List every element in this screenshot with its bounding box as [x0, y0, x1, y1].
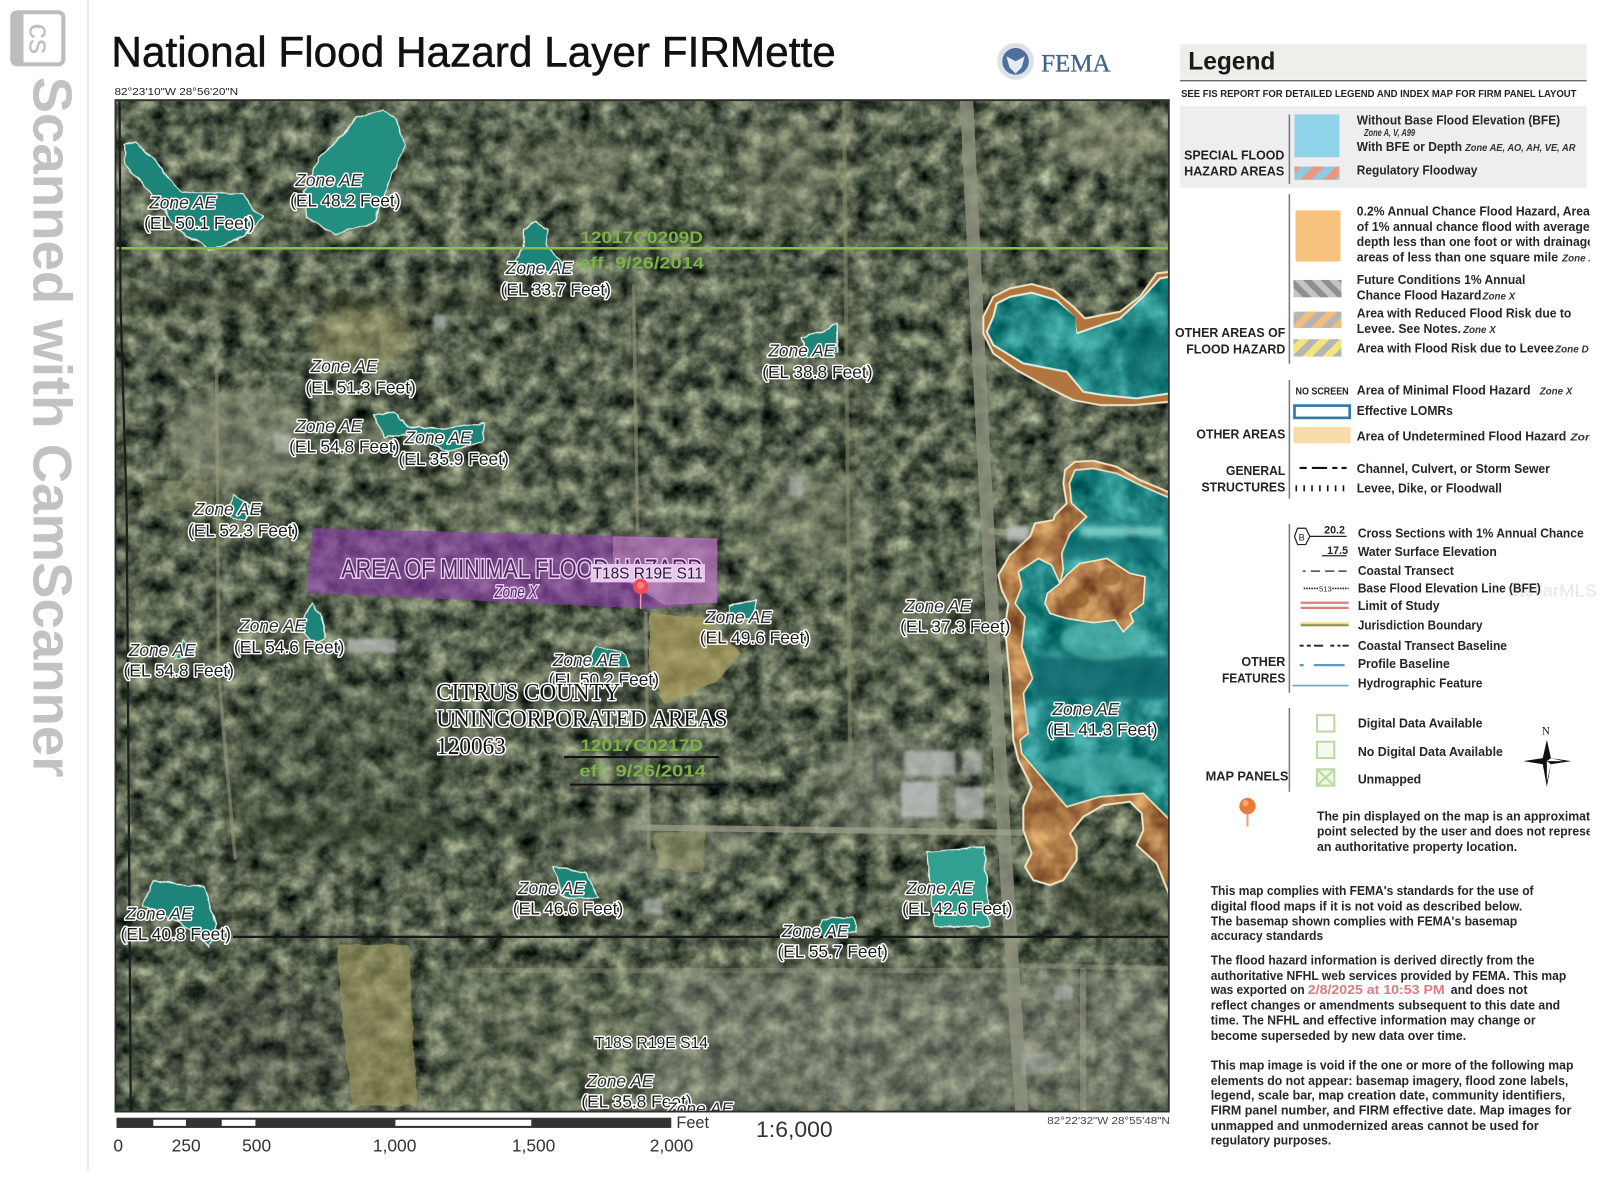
legend group: other areas and general structures: [1196, 380, 1600, 499]
community label: [436, 679, 727, 760]
zone label EL 50.1: [144, 192, 254, 233]
legend group: other areas and general structures: Area of Undetermined Flood Hazard: [1357, 428, 1566, 443]
zone label EL 46.6: Zone AE: [517, 878, 585, 898]
legend group: other features: 17.5: [1327, 545, 1348, 557]
water bands: [1027, 527, 1168, 787]
map scale ratio: 1:6,000: [756, 1117, 833, 1142]
zone label EL 41.3: Zone AE: [1051, 699, 1120, 719]
lighter clearings and neighbourhoods: [115, 107, 1170, 1109]
zone label EL 49.6: (EL 49.6 Feet): [700, 628, 810, 648]
zone label EL 42.6: Zone AE: [905, 878, 974, 898]
compliance note: [1211, 883, 1534, 943]
legend group: other areas of flood hazard: [1175, 194, 1595, 364]
icon: location pin: [633, 579, 648, 609]
legend group: special flood hazard areas: Zone AE, AO, AH, VE, AR: [1464, 143, 1575, 154]
scale bar: [113, 1114, 710, 1155]
zone label EL 54.8 lower: [124, 640, 234, 680]
zone label EL 51.3: Zone AE: [310, 356, 378, 376]
zone label EL 33.7: (EL 33.7 Feet): [501, 279, 611, 299]
compliance note: The basemap shown complies with FEMA's basemap: [1211, 914, 1517, 929]
title: National Flood Hazard Layer FIRMette: [111, 28, 836, 76]
area of minimal flood hazard overlay: [307, 528, 717, 609]
CamScanner watermark: [11, 0, 88, 1171]
satellite map with flood zones: [115, 100, 1171, 1119]
legend group: other areas of flood hazard: Area with Flood Risk due to Levee: [1357, 340, 1554, 355]
legend group: special flood hazard areas: Without Base Flood Elevation (BFE): [1357, 113, 1560, 128]
icon: legend pin: [1239, 798, 1256, 827]
export date note: was exported on: [1210, 982, 1305, 997]
legend group: special flood hazard areas: [1180, 106, 1587, 188]
legend group: other features: Base Flood Elevation Line (BFE): [1358, 581, 1541, 596]
zone label EL 37.3: (EL 37.3 Feet): [900, 616, 1010, 636]
zone label EL 48.2: Zone AE: [294, 170, 363, 190]
panel label: 12017C0209D: eff. 9/26/2014: [579, 255, 704, 273]
export date note: [1210, 952, 1566, 1043]
zone label EL 54.6: (EL 54.6 Feet): [234, 637, 344, 657]
icon: north arrow: N: [1542, 726, 1550, 738]
zone label EL 41.3: (EL 41.3 Feet): [1047, 720, 1158, 740]
export date note: authoritative NFHL web services provided by FEMA. This map: [1211, 968, 1566, 983]
compliance note: digital flood maps if it is not void as described below.: [1211, 898, 1522, 913]
void conditions note: regulatory purposes.: [1211, 1132, 1331, 1147]
section label T18S R19E S14: T18S R19E S14: [595, 1035, 709, 1052]
flood zone labels: [121, 170, 1158, 1119]
flood zone shape: upper lake: [983, 272, 1170, 405]
zone label EL 51.3: [306, 356, 416, 397]
legend group: other features: OTHER: [1241, 654, 1286, 669]
zone label EL 54.6: Zone AE: [238, 615, 306, 635]
zone label EL 54.8 upper: [289, 416, 399, 457]
zone label EL 55.7: Zone AE: [781, 921, 849, 941]
zone label EL 54.8 upper: Zone AE: [294, 416, 363, 436]
legend group: other areas and general structures: GENERAL: [1226, 463, 1285, 478]
zone label EL 38.8: Zone AE: [767, 341, 836, 361]
zone label EL 52.3: [188, 499, 298, 540]
zone label EL 40.8: (EL 40.8 Feet): [121, 924, 231, 944]
legend group: map panels: MAP PANELS: [1206, 769, 1289, 784]
zone label EL 50.2: [549, 650, 659, 690]
legend group: map panels: Unmapped: [1358, 772, 1421, 787]
sand island: [1045, 558, 1145, 632]
legend heading: Legend: [1188, 48, 1275, 75]
flood zone shapes: small ponds: [125, 109, 989, 946]
zone label EL 54.6: [234, 615, 344, 657]
void conditions note: [1211, 1058, 1574, 1147]
icon: CS logo: cs: [23, 23, 57, 54]
scale bar: 1,000: [373, 1135, 416, 1155]
zone label EL 51.3: (EL 51.3 Feet): [306, 377, 416, 397]
void conditions note: elements do not appear: basemap imagery, flood zone labels,: [1211, 1073, 1568, 1088]
community label: CITRUS COUNTY: [436, 679, 620, 706]
legend group: other areas and general structures: Levee, Dike, or Floodwall: [1357, 480, 1502, 495]
void conditions note: FIRM panel number, and FIRM effective date. Map images for: [1211, 1103, 1571, 1118]
zone label EL 42.6: [902, 878, 1012, 918]
panel label: 12017C0209D: [580, 232, 704, 269]
legend group: other areas and general structures: Zone X: [1539, 386, 1573, 397]
void conditions note: unmapped and unmodernized areas cannot be used for: [1211, 1118, 1539, 1133]
legend group: other areas of flood hazard: Zone X: [1561, 254, 1595, 265]
legend group: other areas of flood hazard: Zone D: [1554, 344, 1589, 355]
legend heading: [1180, 44, 1587, 81]
watermark text: Scanned with CamScanner: [22, 77, 84, 778]
map border: [115, 100, 1169, 1112]
label: area of minimal flood hazard: AREA OF MINIMAL FLOOD HAZARD: [341, 555, 703, 583]
icon: CS logo: [11, 11, 63, 65]
pin note: [1317, 808, 1600, 854]
top-left coordinates: 82°23'10"W 28°56'20"N: [114, 87, 238, 98]
legend group: other areas of flood hazard: Zone X: [1481, 291, 1516, 302]
tan fields: [143, 480, 741, 1105]
community label: UNINCORPORATED AREAS: [436, 705, 727, 732]
scale bar: 0: [113, 1135, 123, 1155]
legend group: other features: [1222, 524, 1584, 693]
zone label EL 48.2: (EL 48.2 Feet): [290, 190, 401, 210]
legend group: special flood hazard areas: With BFE or Depth: [1357, 139, 1462, 154]
zone label EL 37.3: [900, 596, 1010, 636]
legend group: other areas of flood hazard: of 1% annual chance flood with average: [1357, 219, 1590, 234]
zone label EL 49.6: [700, 607, 810, 648]
label: T18S R19E S11: T18S R19E S11: [593, 565, 703, 582]
legend group: other features: Coastal Transect: [1358, 563, 1455, 578]
zone label EL 33.7: Zone AE: [505, 258, 573, 278]
panel label: 12017C0217D: eff. 9/26/2014: [579, 762, 706, 780]
legend group: other features: Water Surface Elevation: [1358, 544, 1497, 559]
legend group: other areas and general structures: Area of Minimal Flood Hazard: [1357, 382, 1531, 397]
export date note: The flood hazard information is derived directly from the: [1211, 952, 1535, 967]
legend group: other areas of flood hazard: Levee. See Notes.: [1357, 321, 1461, 336]
export date note: and does not: [1451, 982, 1528, 997]
zone label EL 37.3: Zone AE: [903, 596, 972, 616]
legend group: other areas and general structures: OTHER AREAS: [1196, 426, 1285, 441]
legend group: other features: Limit of Study: [1358, 598, 1440, 613]
zone label EL 46.6: (EL 46.6 Feet): [513, 898, 623, 918]
zone label EL 35.9: (EL 35.9 Feet): [398, 449, 509, 469]
legend group: other areas of flood hazard: FLOOD HAZARD: [1186, 342, 1286, 357]
zone label EL 35.9: Zone AE: [404, 427, 472, 447]
zone label EL 33.7: [501, 258, 611, 299]
label: Zone X: Zone X: [494, 582, 539, 602]
legend group: other areas and general structures: Effective LOMRs: [1357, 403, 1453, 418]
legend group: map panels: [1206, 708, 1503, 792]
legend group: other areas of flood hazard: depth less than one foot or with drainage: [1357, 234, 1594, 249]
icon: DHS seal: [997, 43, 1034, 80]
zone label EL 54.8 lower: Zone AE: [128, 640, 196, 660]
scale bar: 2,000: [650, 1135, 693, 1155]
legend note: SEE FIS REPORT FOR DETAILED LEGEND AND INDEX MAP FOR FIRM PANEL LAYOUT: [1181, 89, 1577, 100]
FEMA logo: [997, 43, 1111, 80]
buildings: [274, 315, 1073, 1075]
legend group: other areas and general structures: Channel, Culvert, or Storm Sewer: [1357, 461, 1550, 476]
community label: 120063: [436, 733, 506, 760]
export date note: 2/8/2025 at 10:53 PM: [1308, 982, 1445, 997]
zone label EL 35.8: (EL 35.8 Feet): [581, 1092, 692, 1112]
pin note: an authoritative property location.: [1317, 839, 1517, 854]
legend group: other areas of flood hazard: 0.2% Annual Chance Flood Hazard, Area: [1357, 204, 1591, 219]
legend group: special flood hazard areas: HAZARD AREAS: [1184, 164, 1284, 179]
legend group: other features: 20.2: [1324, 524, 1345, 536]
zone label EL 38.8: (EL 38.8 Feet): [762, 362, 873, 382]
legend group: special flood hazard areas: SPECIAL FLOOD: [1184, 147, 1285, 162]
export date note: become superseded by new data over time.: [1211, 1028, 1466, 1043]
zone label EL 50.2: Zone AE: [552, 650, 620, 670]
pin note: The pin displayed on the map is an approximate: [1317, 808, 1597, 823]
panel label: 12017C0217D: [564, 737, 727, 785]
zone label EL 46.6: [513, 878, 623, 918]
legend group: other areas and general structures: NO SCREEN: [1296, 386, 1349, 397]
zone label EL 35.9: [398, 427, 509, 469]
scale bar: 500: [242, 1135, 271, 1155]
flood zone shape: lower lake: [998, 461, 1170, 897]
legend group: other areas of flood hazard: areas of less than one square mile: [1357, 250, 1558, 265]
legend group: other areas of flood hazard: OTHER AREAS OF: [1175, 325, 1285, 340]
scale bar: 250: [172, 1135, 201, 1155]
legend group: other areas of flood hazard: Area with Reduced Flood Risk due to: [1357, 306, 1572, 321]
legend group: other areas of flood hazard: Zone X: [1462, 325, 1496, 336]
zone label EL 42.6: (EL 42.6 Feet): [902, 898, 1012, 918]
legend group: special flood hazard areas: Regulatory Floodway: [1357, 163, 1478, 178]
scale bar: Feet: [676, 1114, 710, 1132]
zone label clipped: Zone AE: [665, 1099, 733, 1119]
zone label EL 41.3: [1047, 699, 1158, 740]
legend group: map panels: No Digital Data Available: [1358, 744, 1503, 759]
legend group: other features: Profile Baseline: [1358, 656, 1450, 671]
zone label EL 52.3: Zone AE: [193, 499, 261, 519]
legend group: other areas of flood hazard: Future Conditions 1% Annual: [1357, 272, 1525, 287]
FEMA wordmark: FEMA: [1041, 49, 1111, 78]
bottom-right coordinates: 82°22'32"W 28°55'48"N: [1047, 1116, 1170, 1127]
void conditions note: This map image is void if the one or more of the following map: [1211, 1058, 1574, 1073]
export date note: time. The NFHL and effective information may change or: [1211, 1013, 1536, 1028]
zone label EL 54.8 upper: (EL 54.8 Feet): [289, 437, 399, 457]
legend group: other features: Cross Sections with 1% Annual Chance: [1358, 525, 1584, 540]
legend group: other features: Jurisdiction Boundary: [1358, 617, 1483, 632]
zone label EL 50.1: Zone AE: [148, 192, 217, 212]
legend group: other features: B: [1299, 532, 1305, 542]
export date note: reflect changes or amendments subsequent to this date and: [1211, 997, 1560, 1012]
legend group: special flood hazard areas: Zone A, V, A99: [1363, 128, 1416, 139]
panel boundary lines: [115, 100, 1171, 1112]
void conditions note: legend, scale bar, map creation date, community identifiers,: [1211, 1087, 1565, 1102]
roads: [217, 100, 1169, 1112]
zone label EL 40.8: Zone AE: [125, 904, 193, 924]
zone label EL 55.7: (EL 55.7 Feet): [778, 941, 888, 961]
zone label EL 50.1: (EL 50.1 Feet): [144, 213, 254, 233]
zone label EL 40.8: [121, 904, 231, 944]
panel label: 12017C0209D: 12017C0209D: [580, 229, 703, 247]
zone label EL 49.6: Zone AE: [704, 607, 772, 627]
compliance note: accuracy standards: [1211, 928, 1323, 943]
zone label EL 35.8: Zone AE: [585, 1071, 654, 1091]
legend group: other areas and general structures: STRUCTURES: [1202, 479, 1285, 494]
StellarMLS watermark: StellarMLS: [1507, 581, 1597, 601]
zone label EL 55.7: [778, 921, 888, 961]
panel: legend: [1175, 44, 1600, 1147]
zone label EL 54.8 lower: (EL 54.8 Feet): [124, 660, 234, 680]
legend group: other features: Hydrographic Feature: [1358, 676, 1482, 691]
compliance note: This map complies with FEMA's standards for the use of: [1211, 883, 1534, 898]
legend group: other features: FEATURES: [1222, 670, 1285, 685]
legend group: map panels: Digital Data Available: [1358, 715, 1482, 730]
icon: north arrow: [1523, 726, 1571, 787]
legend group: other areas of flood hazard: Chance Flood Hazard: [1357, 287, 1481, 302]
zone label EL 35.8: [581, 1071, 692, 1112]
zone label EL 38.8: [762, 341, 873, 382]
legend group: other areas and general structures: Zone: [1569, 432, 1600, 443]
legend group: other features: Coastal Transect Baseline: [1358, 638, 1507, 653]
legend group: other features: 513: [1319, 585, 1332, 594]
zone label EL 52.3: (EL 52.3 Feet): [188, 520, 298, 540]
scale bar: 1,500: [512, 1135, 555, 1155]
zone label EL 50.2: (EL 50.2 Feet): [549, 670, 659, 690]
zone label EL 48.2: [290, 170, 401, 210]
panel label: 12017C0217D: 12017C0217D: [580, 737, 703, 755]
